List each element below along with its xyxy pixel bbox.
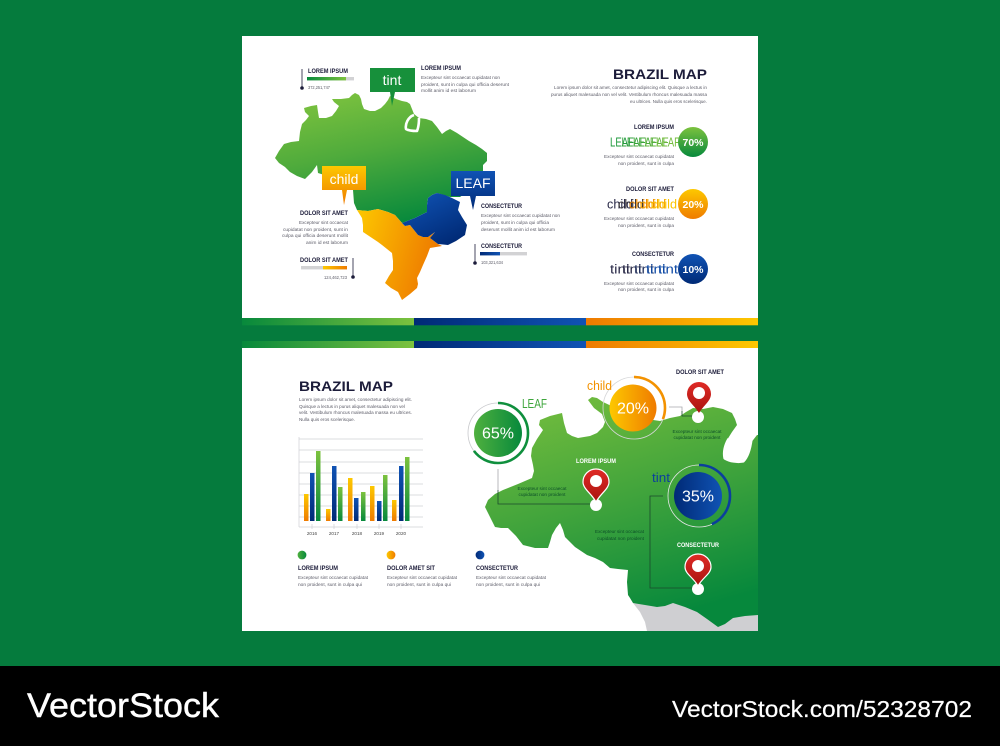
text block: dolor sit amet — [282, 211, 349, 245]
stat: consectetur 103,321,634 — [473, 244, 527, 265]
heading: Brazil Map: eu ultrices. Nulla quis eros scelerisque. — [630, 99, 707, 104]
stat: consectetur 103,321,634: CONSECTETUR — [481, 244, 523, 250]
stat row: 20% child: Excepteur sint occaecat cupidatat — [604, 216, 675, 221]
legend: dolor amet sit: non proident, sunt in culpa qui — [387, 582, 451, 587]
callout: child: child — [330, 171, 358, 187]
legend: lorem ipsum — [298, 551, 369, 587]
neighbouring land — [633, 601, 758, 631]
text block: dolor sit amet: Excepteur sint occaecat — [299, 220, 349, 225]
stat row: 20% child: non proident, sunt in culpa — [618, 223, 674, 228]
stat row: 10% tint: tint — [622, 262, 643, 276]
pin: dolor sit amet — [672, 370, 724, 440]
bar chart: 2020 — [396, 531, 407, 536]
stat row: 20% child: DOLOR SIT AMET — [626, 187, 674, 193]
panel: upper slide — [242, 36, 758, 325]
donut: 65% LEAF: 65% — [482, 426, 514, 442]
connector: donut to pin, consectetur — [650, 496, 693, 588]
color band: lower slide — [242, 341, 758, 348]
text block: consectetur: proident, sunt in culpa qui officia — [481, 220, 549, 225]
stat row: 10% tint: tint — [646, 262, 667, 276]
stat: dolor sit amet 124,462,723 — [300, 258, 355, 280]
callout: LEAF: LEAF — [455, 175, 491, 191]
text block: map note centre — [595, 529, 645, 541]
heading: Brazil Map: Lorem ipsum dolor sit amet, consectetur adipiscing elit. — [299, 397, 412, 402]
donut: 20% child: 20% — [617, 400, 649, 418]
stat row: 20% child: child — [651, 198, 677, 212]
bar chart: 2018 — [352, 531, 363, 536]
pin: dolor sit amet: DOLOR SIT AMET — [676, 370, 724, 376]
water ring around island — [725, 439, 751, 461]
text block: lorem ipsum: Excepteur sint occaecat cupidatat non — [421, 75, 500, 80]
donut: 35% tint — [652, 465, 730, 527]
panel: lower slide — [242, 341, 758, 631]
brand wordmark: VectorStock — [27, 687, 220, 725]
stat row: 10% tint: tint — [610, 262, 631, 276]
heading: Brazil Map: Quisque a lectus in purus aliquet malesuada non vel — [299, 404, 405, 409]
text block: consectetur: Excepteur sint occaecat cupidatat non — [481, 213, 560, 218]
legend: dolor amet sit: Excepteur sint occaecat cupidatat — [387, 575, 458, 580]
region: north green — [275, 93, 487, 223]
callout: tint — [370, 68, 415, 106]
text block: lorem ipsum: mollit anim id est laborum — [421, 88, 476, 93]
donut: 65% LEAF — [468, 396, 547, 463]
donut: 20% child: child — [587, 378, 612, 393]
stat row: 20% child: child — [607, 198, 633, 212]
heading: Brazil Map — [299, 378, 412, 422]
stat row: 20% child: child — [618, 198, 644, 212]
connector: donut to pin, dolor sit amet — [669, 407, 693, 416]
text block: consectetur — [481, 204, 560, 232]
region: east blue — [402, 193, 467, 245]
text block: consectetur: deserunt mollit anim id est laborum — [481, 227, 555, 232]
text block: lorem ipsum: proident, sunt in culpa qui officia deserunt — [421, 82, 510, 87]
stat: lorem ipsum 372,251,747 — [300, 69, 354, 90]
text block: map note centre: Excepteur sint occaecat — [595, 529, 645, 534]
stat row: 20% child — [604, 187, 708, 228]
bar chart: 2019 — [374, 531, 385, 536]
stat row: 20% child: child — [629, 198, 655, 212]
heading: Brazil Map: purus aliquet malesuada non vel velit. Vestibulum rhoncus malesuada massa — [551, 92, 707, 97]
stat: consectetur 103,321,634: 103,321,634 — [481, 260, 503, 265]
footer bar — [0, 666, 1000, 746]
connector: donut to pin, lorem ipsum — [498, 469, 590, 504]
legend: dolor amet sit — [387, 551, 458, 587]
legend: lorem ipsum: non proident, sunt in culpa qui — [298, 582, 362, 587]
stat row: 10% tint: tint — [634, 262, 655, 276]
pin: lorem ipsum — [576, 459, 616, 511]
legend: dolor amet sit: DOLOR AMET SIT — [387, 566, 435, 572]
stat row: 10% tint: non proident, sunt in culpa — [618, 287, 674, 292]
stat: dolor sit amet 124,462,723: 124,462,723 — [324, 275, 347, 280]
bar chart — [299, 437, 423, 536]
callout: child — [322, 166, 366, 205]
stat: lorem ipsum 372,251,747: 372,251,747 — [308, 85, 330, 90]
stat row: 20% child: child — [640, 198, 666, 212]
pin: consectetur — [677, 543, 720, 595]
stat row: 20% child: 20% — [682, 199, 704, 211]
text block: consectetur: CONSECTETUR — [481, 204, 523, 210]
water ring around island — [406, 115, 419, 131]
stat row: 70% LEAF: LEAF — [656, 136, 680, 150]
text block: map note centre: cupidatat non proident — [597, 536, 645, 541]
heading: Brazil Map: BRAZIL MAP — [299, 378, 393, 394]
bar chart: 2016 — [307, 531, 318, 536]
region: green land — [485, 397, 758, 627]
donut: 35% tint: tint — [652, 470, 670, 485]
legend: consectetur — [476, 551, 547, 587]
image url: VectorStock.com/52328702 — [672, 696, 972, 722]
heading: Brazil Map: Nulla quis eros scelerisque. — [299, 417, 355, 422]
stat: dolor sit amet 124,462,723: DOLOR SIT AMET — [300, 258, 348, 264]
pin: lorem ipsum: LOREM IPSUM — [576, 459, 616, 465]
legend: lorem ipsum: Excepteur sint occaecat cupidatat — [298, 575, 369, 580]
pin: dolor sit amet: cupidatat non proident — [674, 435, 721, 440]
Brazil map: full country — [275, 93, 487, 300]
stat row: 70% LEAF — [604, 125, 708, 166]
heading: Brazil Map: velit. Vestibulum rhoncus malesuada massa eu ultrices. — [299, 410, 412, 415]
color band: upper slide — [242, 318, 758, 325]
stat row: 70% LEAF: LOREM IPSUM — [634, 125, 674, 131]
legend: consectetur: Excepteur sint occaecat cupidatat — [476, 575, 547, 580]
text block: map note left: Excepteur sint occaecat — [518, 486, 567, 491]
pin: consectetur: CONSECTETUR — [677, 543, 720, 549]
text block: map note left — [518, 486, 567, 497]
legend: consectetur: non proident, sunt in culpa qui — [476, 582, 540, 587]
callout: LEAF — [451, 171, 495, 210]
stat row: 70% LEAF: 70% — [682, 137, 704, 149]
pin: dolor sit amet: Excepteur sint occaecat — [672, 429, 722, 434]
region: south orange — [357, 209, 442, 300]
stat row: 70% LEAF: Excepteur sint occaecat cupidatat — [604, 154, 675, 159]
bar chart: 2017 — [329, 531, 340, 536]
heading: Brazil Map: BRAZIL MAP — [613, 66, 707, 82]
text block: lorem ipsum — [421, 66, 510, 93]
donut: 35% tint: 35% — [682, 488, 714, 506]
stat row: 10% tint: 10% — [682, 264, 704, 276]
heading: Brazil Map — [551, 66, 707, 104]
zoomed map — [485, 397, 758, 631]
text block: dolor sit amet: anim id est laborum — [306, 240, 348, 245]
donut: 65% LEAF: LEAF — [522, 396, 547, 411]
stat: lorem ipsum 372,251,747: LOREM IPSUM — [308, 69, 348, 75]
stat row: 70% LEAF: LEAF — [610, 136, 634, 150]
stat row: 10% tint: CONSECTETUR — [632, 252, 675, 258]
text block: dolor sit amet: culpa qui officia deserunt mollit — [282, 233, 349, 238]
stat row: 70% LEAF: LEAF — [644, 136, 669, 150]
stat row: 70% LEAF: LEAF — [622, 136, 646, 150]
text block: map note left: cupidatat non proident — [518, 492, 566, 497]
stat row: 10% tint — [604, 252, 708, 292]
stat row: 70% LEAF: LEAF — [633, 136, 657, 150]
text block: dolor sit amet: DOLOR SIT AMET — [300, 211, 348, 217]
stat row: 70% LEAF: non proident, sunt in culpa — [618, 161, 674, 166]
stat row: 10% tint: Excepteur sint occaecat cupidatat — [604, 281, 675, 286]
stat row: 10% tint: tint — [658, 262, 679, 276]
legend: consectetur: CONSECTETUR — [476, 566, 519, 572]
text block: lorem ipsum: LOREM IPSUM — [421, 66, 461, 72]
callout: tint: tint — [383, 72, 401, 88]
legend: lorem ipsum: LOREM IPSUM — [298, 566, 338, 572]
donut: 20% child — [587, 377, 665, 439]
heading: Brazil Map: Lorem ipsum dolor sit amet, consectetur adipiscing elit. Quisque a lectus in — [554, 85, 707, 90]
text block: dolor sit amet: cupidatat non proident, sunt in — [283, 227, 348, 232]
